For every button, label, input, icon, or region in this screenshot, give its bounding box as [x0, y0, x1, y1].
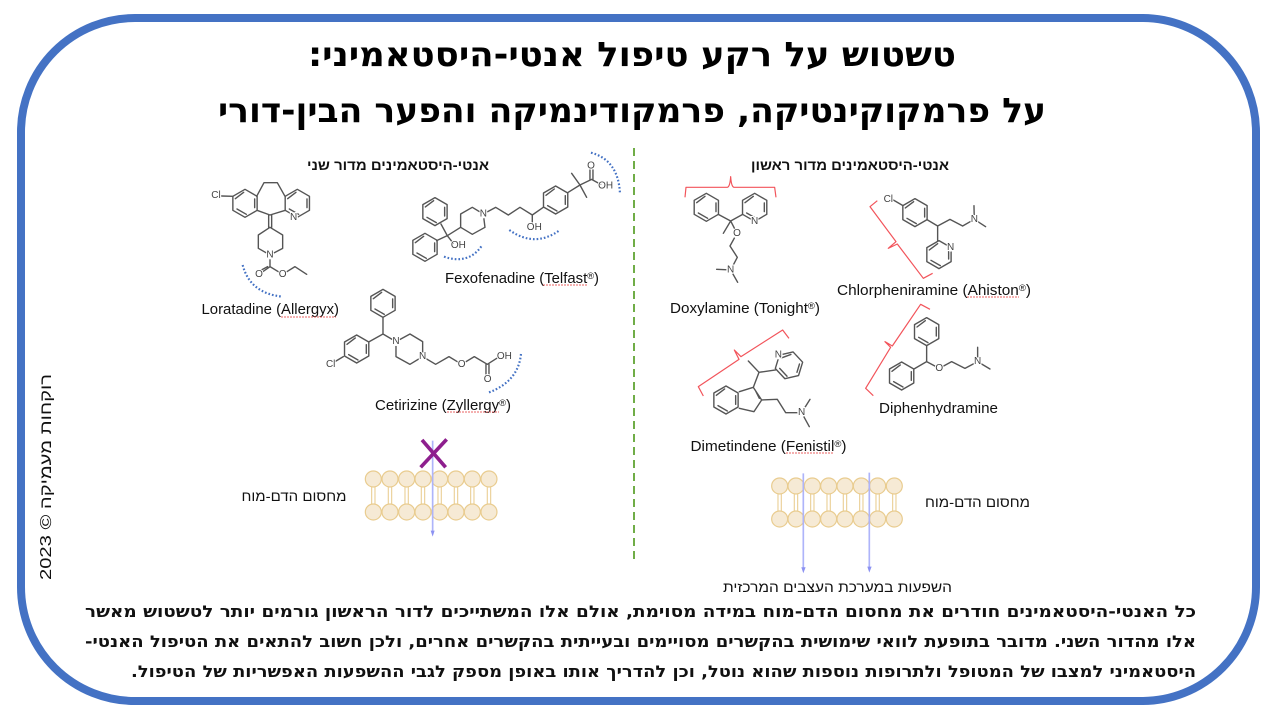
title: על פרמקוקינטיקה, פרמקודינמיקה והפער הבין-דורי — [218, 91, 1046, 131]
molecule: Diphenhydramine: N — [974, 356, 981, 367]
label: Chlorpheniramine: Chlorpheniramine (Ahiston — [837, 283, 1009, 299]
molecule: Loratadine: Cl — [211, 190, 221, 201]
label: CNS effects: השפעות במערכת העצבים המרכזית — [723, 579, 952, 595]
label: Dimetindene: ® — [834, 439, 842, 449]
molecule: Diphenhydramine — [866, 304, 990, 396]
label: Chlorpheniramine: ® — [1019, 283, 1026, 293]
molecule: Cetirizine: N — [392, 336, 400, 347]
molecule: Fexofenadine: N — [480, 208, 487, 219]
molecule: Fexofenadine: OH — [451, 240, 466, 251]
molecule: Cetirizine: OH — [497, 351, 512, 362]
molecule: Doxylamine: N — [751, 216, 758, 227]
molecule: Loratadine: O — [255, 269, 263, 280]
diagram: blood-brain barrier crossed — [772, 473, 902, 573]
molecule: Doxylamine — [685, 177, 776, 282]
arrow: crossing into CNS (left) — [801, 473, 806, 573]
label: Doxylamine: ® — [808, 301, 815, 311]
molecule: Chlorpheniramine: Cl — [884, 194, 893, 205]
diagram: blood-brain barrier blocked — [365, 439, 497, 537]
arc: dotted polar group — [488, 354, 521, 393]
molecule: Cetirizine — [326, 289, 521, 393]
label: Fexofenadine: Fexofenadine (Telfast — [445, 271, 584, 287]
molecule: Loratadine: O — [279, 269, 287, 280]
label: Loratadine: Loratadine (Allergyx) — [202, 302, 339, 318]
molecule: Loratadine: N — [266, 249, 274, 260]
molecule: Cetirizine: O — [484, 374, 492, 385]
molecule: Fexofenadine: OH — [527, 222, 542, 233]
label: Dimetindene: Dimetindene (Fenistil — [690, 439, 827, 455]
molecule: Diphenhydramine: O — [935, 363, 943, 374]
molecule: Cetirizine: O — [458, 359, 466, 370]
text block: summary paragraph: אלו מהדור השני. מדובר בתופעת לוואי שימושית בהקשרים מסויימים ובעייתית בהקשרים אחרים, ולכן חשוב להתאים את הטיפול האנטי- — [85, 632, 1196, 651]
text block: summary paragraph — [85, 602, 1196, 681]
molecule: Chlorpheniramine — [870, 194, 986, 278]
label: Doxylamine: ) — [815, 301, 820, 317]
arrow: weak passage — [431, 441, 435, 537]
molecule: Chlorpheniramine: N — [947, 242, 954, 253]
bracket: Diphenhydramine — [866, 304, 930, 396]
label: blood-brain barrier (right): מחסום הדם-מוח — [925, 494, 1030, 510]
molecule: Dimetindene — [698, 330, 810, 427]
molecule: Cetirizine: N — [419, 351, 426, 362]
molecule: Dimetindene: N — [798, 407, 805, 418]
text block: summary paragraph: כל האנטי-היסטאמינים חודרים את מחסום הדם-מוח במידה מסוימת, אולם אלו המשתייכים לדור הראשון גורמים יותר לטשטוש מאשר — [85, 602, 1196, 621]
credit: vertical copyright: רוקחות מעמיקה © 2023 — [38, 374, 55, 580]
bracket: Doxylamine — [685, 177, 776, 197]
bracket: Chlorpheniramine — [870, 201, 933, 278]
label: Fexofenadine: ) — [594, 271, 599, 287]
label: Cetirizine: ® — [499, 398, 506, 408]
label: Doxylamine: Doxylamine (Tonight — [670, 301, 801, 317]
label: Cetirizine: ) — [506, 398, 511, 414]
arc: dotted polar groups — [444, 153, 620, 259]
molecule: Fexofenadine: OH — [598, 180, 613, 191]
heading: first generation: אנטי-היסטאמינים מדור ראשון — [751, 157, 949, 173]
title: טשטוש על רקע טיפול אנטי-היסטאמיני: — [308, 35, 956, 75]
label: Diphenhydramine: Diphenhydramine — [879, 401, 998, 417]
label: Cetirizine: Cetirizine (Zyllergy — [375, 398, 495, 414]
molecule: Cetirizine: Cl — [326, 359, 335, 370]
molecule: Dimetindene: N — [775, 349, 782, 360]
label: Dimetindene: ) — [841, 439, 846, 455]
arc: dotted polar group — [243, 265, 282, 297]
bracket: Dimetindene — [698, 330, 789, 396]
divider: green dashed line between generations — [633, 148, 635, 564]
molecule: Loratadine — [211, 183, 309, 297]
title — [218, 35, 1046, 131]
molecule: Fexofenadine — [413, 153, 620, 261]
label: blood-brain barrier (left): מחסום הדם-מוח — [242, 488, 346, 504]
molecule: Doxylamine: N — [727, 264, 734, 275]
molecule: Loratadine: N — [290, 212, 297, 223]
label: Fexofenadine: ® — [587, 271, 594, 281]
molecule: Doxylamine: O — [733, 228, 741, 239]
heading: second generation: אנטי-היסטאמינים מדור שני — [307, 157, 489, 173]
label: Chlorpheniramine: ) — [1026, 283, 1031, 299]
arrow: crossing into CNS (right) — [867, 473, 872, 573]
molecule: Chlorpheniramine: N — [971, 214, 978, 225]
icon: purple cross — [421, 439, 447, 467]
molecule: Fexofenadine: O — [587, 160, 595, 171]
text block: summary paragraph: היסטאמיני למצבו של המטופל ולתרופות נוספות שהוא נוטל, וכן להדריך אותו באופן מספק לגבי ההשפעות האפשריות של הטיפול. — [131, 662, 1196, 681]
